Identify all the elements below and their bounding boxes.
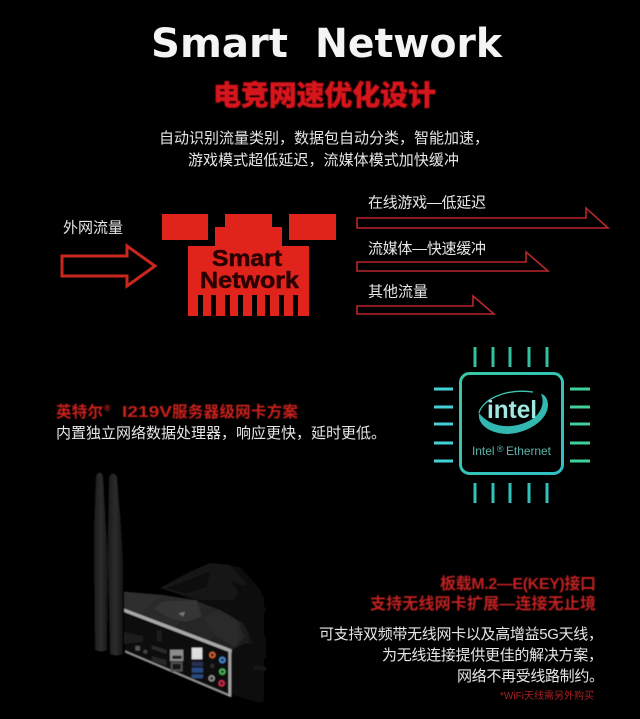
subtitle: 电竞网速优化设计 <box>213 80 436 111</box>
heading: Intel I219V: 英特尔 <box>56 402 103 421</box>
silver edges of the I/O plate <box>124 608 232 653</box>
heading: M.2 E-key: 支持无线网卡扩展—连接无止境 <box>370 594 596 613</box>
arrow: inbound <box>62 246 155 286</box>
heading: Intel I219V <box>56 402 298 421</box>
label: streaming: 流媒体—快速缓冲 <box>368 240 486 258</box>
Intel Ethernet label: ® <box>494 444 506 454</box>
text: wireless description: 网络不再受线路制约。 <box>457 668 604 685</box>
image: motherboard I/O with antennas <box>94 472 293 710</box>
chip label: Network <box>200 267 299 293</box>
Intel Ethernet label: Intel <box>472 444 495 458</box>
heading: Intel I219V: 服务器级网卡方案 <box>172 402 298 421</box>
motherboard section <box>124 560 293 710</box>
text: wireless description <box>319 626 604 685</box>
heading: Intel I219V: I219V <box>122 404 173 421</box>
intro text: 自动识别流量类别，数据包自动分类，智能加速， <box>159 129 489 147</box>
icon: Smart Network chip <box>162 214 336 316</box>
arrow: streaming <box>357 252 548 271</box>
antenna connector <box>124 632 143 644</box>
heading: M.2 E-key <box>370 574 596 613</box>
antenna left <box>94 472 108 652</box>
port cluster <box>135 630 226 687</box>
intel logo <box>479 391 548 434</box>
chip label <box>200 245 299 293</box>
intro text: 游戏模式超低延迟，流媒体模式加快缓冲 <box>188 152 459 169</box>
title: Network <box>315 21 503 67</box>
chip label: Smart <box>212 245 282 271</box>
title: Smart <box>151 21 288 67</box>
icon: Intel Ethernet chip <box>434 347 590 503</box>
intel logo: intel <box>487 396 537 424</box>
label: other traffic: 其他流量 <box>368 284 428 300</box>
text: wireless description: 为无线连接提供更佳的解决方案， <box>382 646 603 664</box>
heading: M.2 E-key: 板载M.2—E(KEY)接口 <box>440 574 596 593</box>
text: wireless description: 可支持双频带无线网卡以及高增益5G天线， <box>319 626 603 643</box>
label: inbound traffic: 外网流量 <box>63 220 123 236</box>
arrow: gaming <box>357 208 608 228</box>
footnote: *WiFi天线需另外购买 <box>500 689 594 702</box>
label: gaming: 在线游戏—低延迟 <box>368 194 486 212</box>
title <box>151 21 503 67</box>
arrow: other traffic <box>357 296 494 314</box>
antenna right <box>108 474 123 656</box>
right-side fade to black <box>233 560 293 710</box>
text: Intel description: 内置独立网络数据处理器，响应更快，延时更低。 <box>56 424 386 442</box>
intro text <box>159 129 489 169</box>
Intel Ethernet label: Ethernet <box>506 444 552 458</box>
heading: Intel I219V: ® <box>104 403 111 413</box>
